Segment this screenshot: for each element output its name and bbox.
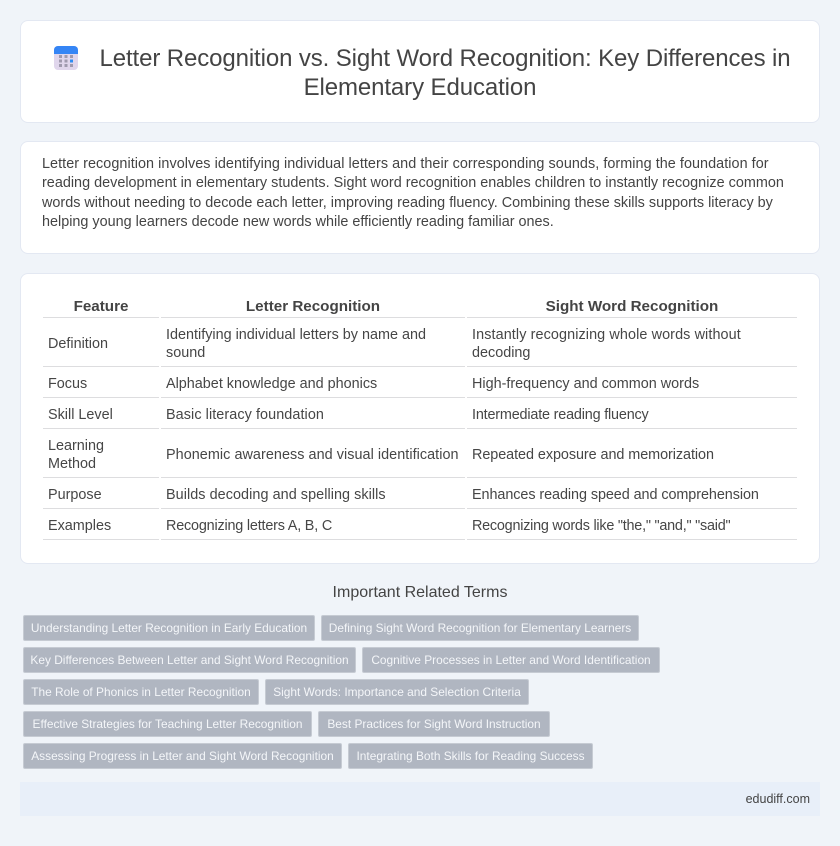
comparison table: Method <box>48 456 96 472</box>
icon: calendar <box>54 46 78 70</box>
comparison table: Skill Level <box>48 407 113 423</box>
related terms heading: Important Related Terms <box>333 584 507 601</box>
related terms tags: The Role of Phonics in Letter Recognition <box>31 685 251 699</box>
comparison table: Learning <box>48 438 104 454</box>
related terms tags: Defining Sight Word Recognition for Elementary Learners <box>329 621 631 635</box>
comparison table: Recognizing letters A, B, C <box>166 518 332 534</box>
header card <box>20 20 820 123</box>
comparison table: Alphabet knowledge and phonics <box>166 376 377 392</box>
related terms tags: Cognitive Processes in Letter and Word Identification <box>371 653 651 667</box>
title: Elementary Education <box>304 74 536 101</box>
comparison table: Sight Word Recognition <box>546 298 718 315</box>
related terms tags: Sight Words: Importance and Selection Criteria <box>273 685 521 699</box>
related terms tags: Effective Strategies for Teaching Letter Recognition <box>33 717 302 731</box>
title <box>100 45 790 101</box>
title: Letter Recognition vs. Sight Word Recognition: Key Differences in <box>100 45 790 72</box>
intro paragraph: words without needing to decode each letter, improving reading fluency. Combining these skills supports literacy by <box>42 195 773 211</box>
comparison table: Instantly recognizing whole words without <box>472 327 741 343</box>
comparison table: Letter Recognition <box>246 298 380 315</box>
related terms tags: Best Practices for Sight Word Instruction <box>327 717 541 731</box>
comparison table: Examples <box>48 518 111 534</box>
comparison table: Enhances reading speed and comprehension <box>472 487 759 503</box>
related terms tags: Integrating Both Skills for Reading Success <box>356 749 585 763</box>
comparison table <box>43 298 797 540</box>
intro paragraph card <box>20 141 820 254</box>
comparison table: Recognizing words like "the," "and," "said" <box>472 518 730 534</box>
footer source text: edudiff.com <box>746 792 810 806</box>
intro paragraph: helping young learners decode new words while efficiently reading familiar ones. <box>42 214 554 230</box>
comparison table: Repeated exposure and memorization <box>472 447 714 463</box>
comparison table: Basic literacy foundation <box>166 407 324 423</box>
intro paragraph: reading development in elementary students. Sight word recognition enables children to instantly recognize common <box>42 175 784 191</box>
comparison table: Phonemic awareness and visual identification <box>166 447 459 463</box>
comparison table: Identifying individual letters by name and <box>166 327 426 343</box>
comparison table: decoding <box>472 345 530 361</box>
comparison table: Intermediate reading fluency <box>472 407 649 423</box>
comparison table: Definition <box>48 336 108 352</box>
comparison table: Builds decoding and spelling skills <box>166 487 386 503</box>
comparison table: sound <box>166 345 205 361</box>
comparison table card <box>20 273 820 564</box>
comparison table: High-frequency and common words <box>472 376 699 392</box>
related terms tags: Assessing Progress in Letter and Sight Word Recognition <box>31 749 334 763</box>
related terms tags <box>23 615 660 769</box>
intro paragraph <box>42 156 784 230</box>
comparison table: Purpose <box>48 487 102 503</box>
comparison table: Feature <box>74 298 128 315</box>
comparison table: Focus <box>48 376 87 392</box>
footer bar <box>20 782 820 816</box>
related terms tags: Key Differences Between Letter and Sight Word Recognition <box>30 653 349 667</box>
intro paragraph: Letter recognition involves identifying individual letters and their corresponding sounds, forming the foundation for <box>42 156 769 172</box>
related terms tags: Understanding Letter Recognition in Early Education <box>31 621 307 635</box>
